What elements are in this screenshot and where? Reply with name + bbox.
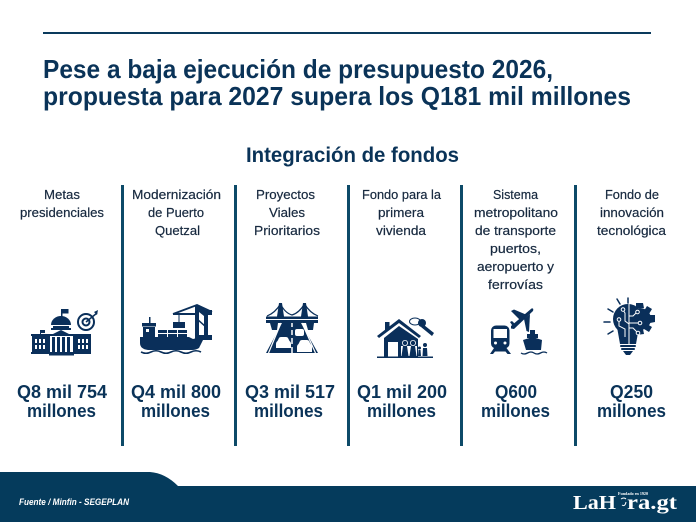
logo: La Hora.gt: ra.gt (627, 492, 677, 514)
label: fondo para la primera vivienda: vivienda (376, 223, 427, 238)
label: fondo para la primera vivienda: primera (378, 205, 425, 220)
value: Q3 mil 517 millones: Q3 mil 517 (245, 382, 335, 402)
heading: integración de fondos: Integración de fondos (246, 144, 459, 167)
value: Q3 mil 517 millones (245, 382, 335, 421)
label: fondo de innovación tecnológica: Fondo de (605, 187, 659, 202)
column: sistema metropolitano (474, 187, 558, 421)
value: Q4 mil 800 millones (131, 382, 221, 421)
label: modernización de puerto quetzal: de Puerto (148, 205, 204, 220)
column: puerto quetzal (131, 187, 221, 421)
label: sistema metropolitano de transporte: Sistema (493, 187, 539, 202)
value: Q250 millones: millones (597, 401, 666, 421)
value: Q250 millones: Q250 (610, 382, 653, 402)
label: fondo para la primera vivienda (362, 187, 442, 238)
label: sistema metropolitano de transporte: metropolitano (474, 205, 558, 220)
value: Q8 mil 754 millones: millones (27, 401, 96, 421)
icon: capitol and target (31, 309, 98, 356)
column: primera vivienda (357, 187, 447, 421)
value: Q600 millones: millones (481, 401, 550, 421)
label: sistema metropolitano de transporte: aeropuerto y (477, 259, 555, 274)
value: Q8 mil 754 millones (17, 382, 107, 421)
label: modernización de puerto quetzal (132, 187, 221, 238)
column: proyectos viales (245, 187, 335, 421)
icon: container ship and crane (140, 305, 212, 353)
title: propuesta para 2027 supera los Q181 mil millones (43, 81, 631, 111)
label: sistema metropolitano de transporte (474, 187, 558, 292)
label: fondo para la primera vivienda: Fondo para la (362, 187, 442, 202)
value: Q4 mil 800 millones: Q4 mil 800 (131, 382, 221, 402)
logo: La Hora.gt: Fundado en 1920 (618, 491, 648, 496)
logo: La Hora.gt (573, 491, 677, 514)
label: sistema metropolitano de transporte: ferrovías (488, 277, 544, 292)
title (43, 54, 631, 111)
value: Q1 mil 200 millones: millones (367, 401, 436, 421)
label: sistema metropolitano de transporte: puertos, (490, 241, 541, 256)
value: Q250 millones (597, 382, 666, 421)
column: innovación tecnológica (597, 187, 667, 421)
label: metas presidenciales: Metas (44, 187, 81, 202)
label: metas presidenciales: presidenciales (20, 205, 104, 220)
title: Pese a baja ejecución de presupuesto 2026, (43, 54, 553, 84)
footer band (0, 472, 696, 522)
label: proyectos viales prioritarios: Prioritarios (254, 223, 321, 238)
label: fondo de innovación tecnológica: tecnológica (597, 223, 667, 238)
label: modernización de puerto quetzal: Quetzal (155, 223, 200, 238)
label: proyectos viales prioritarios: Viales (269, 205, 305, 220)
icon: house, family and key (377, 318, 434, 358)
source note: Fuente / Minfin - SEGEPLAN (19, 497, 130, 508)
value: Q600 millones (481, 382, 550, 421)
icon: bridge and highway (266, 303, 318, 353)
value: Q1 mil 200 millones: Q1 mil 200 (357, 382, 447, 402)
icon: lightbulb with gear (604, 298, 655, 355)
column: metas presidenciales (17, 187, 107, 421)
label: modernización de puerto quetzal: Modernización (132, 187, 221, 202)
label: sistema metropolitano de transporte: de transporte (475, 223, 556, 238)
label: fondo de innovación tecnológica: innovación (600, 205, 664, 220)
value: Q1 mil 200 millones (357, 382, 447, 421)
label: metas presidenciales (20, 187, 104, 220)
logo: La Hora.gt: LaH (573, 492, 616, 514)
label: proyectos viales prioritarios (254, 187, 321, 238)
value: Q3 mil 517 millones: millones (254, 401, 323, 421)
value: Q8 mil 754 millones: Q8 mil 754 (17, 382, 107, 402)
label: proyectos viales prioritarios: Proyectos (256, 187, 315, 202)
value: Q4 mil 800 millones: millones (141, 401, 210, 421)
label: fondo de innovación tecnológica (597, 187, 667, 238)
icon: train, plane and ship (490, 308, 547, 354)
value: Q600 millones: Q600 (495, 382, 537, 402)
